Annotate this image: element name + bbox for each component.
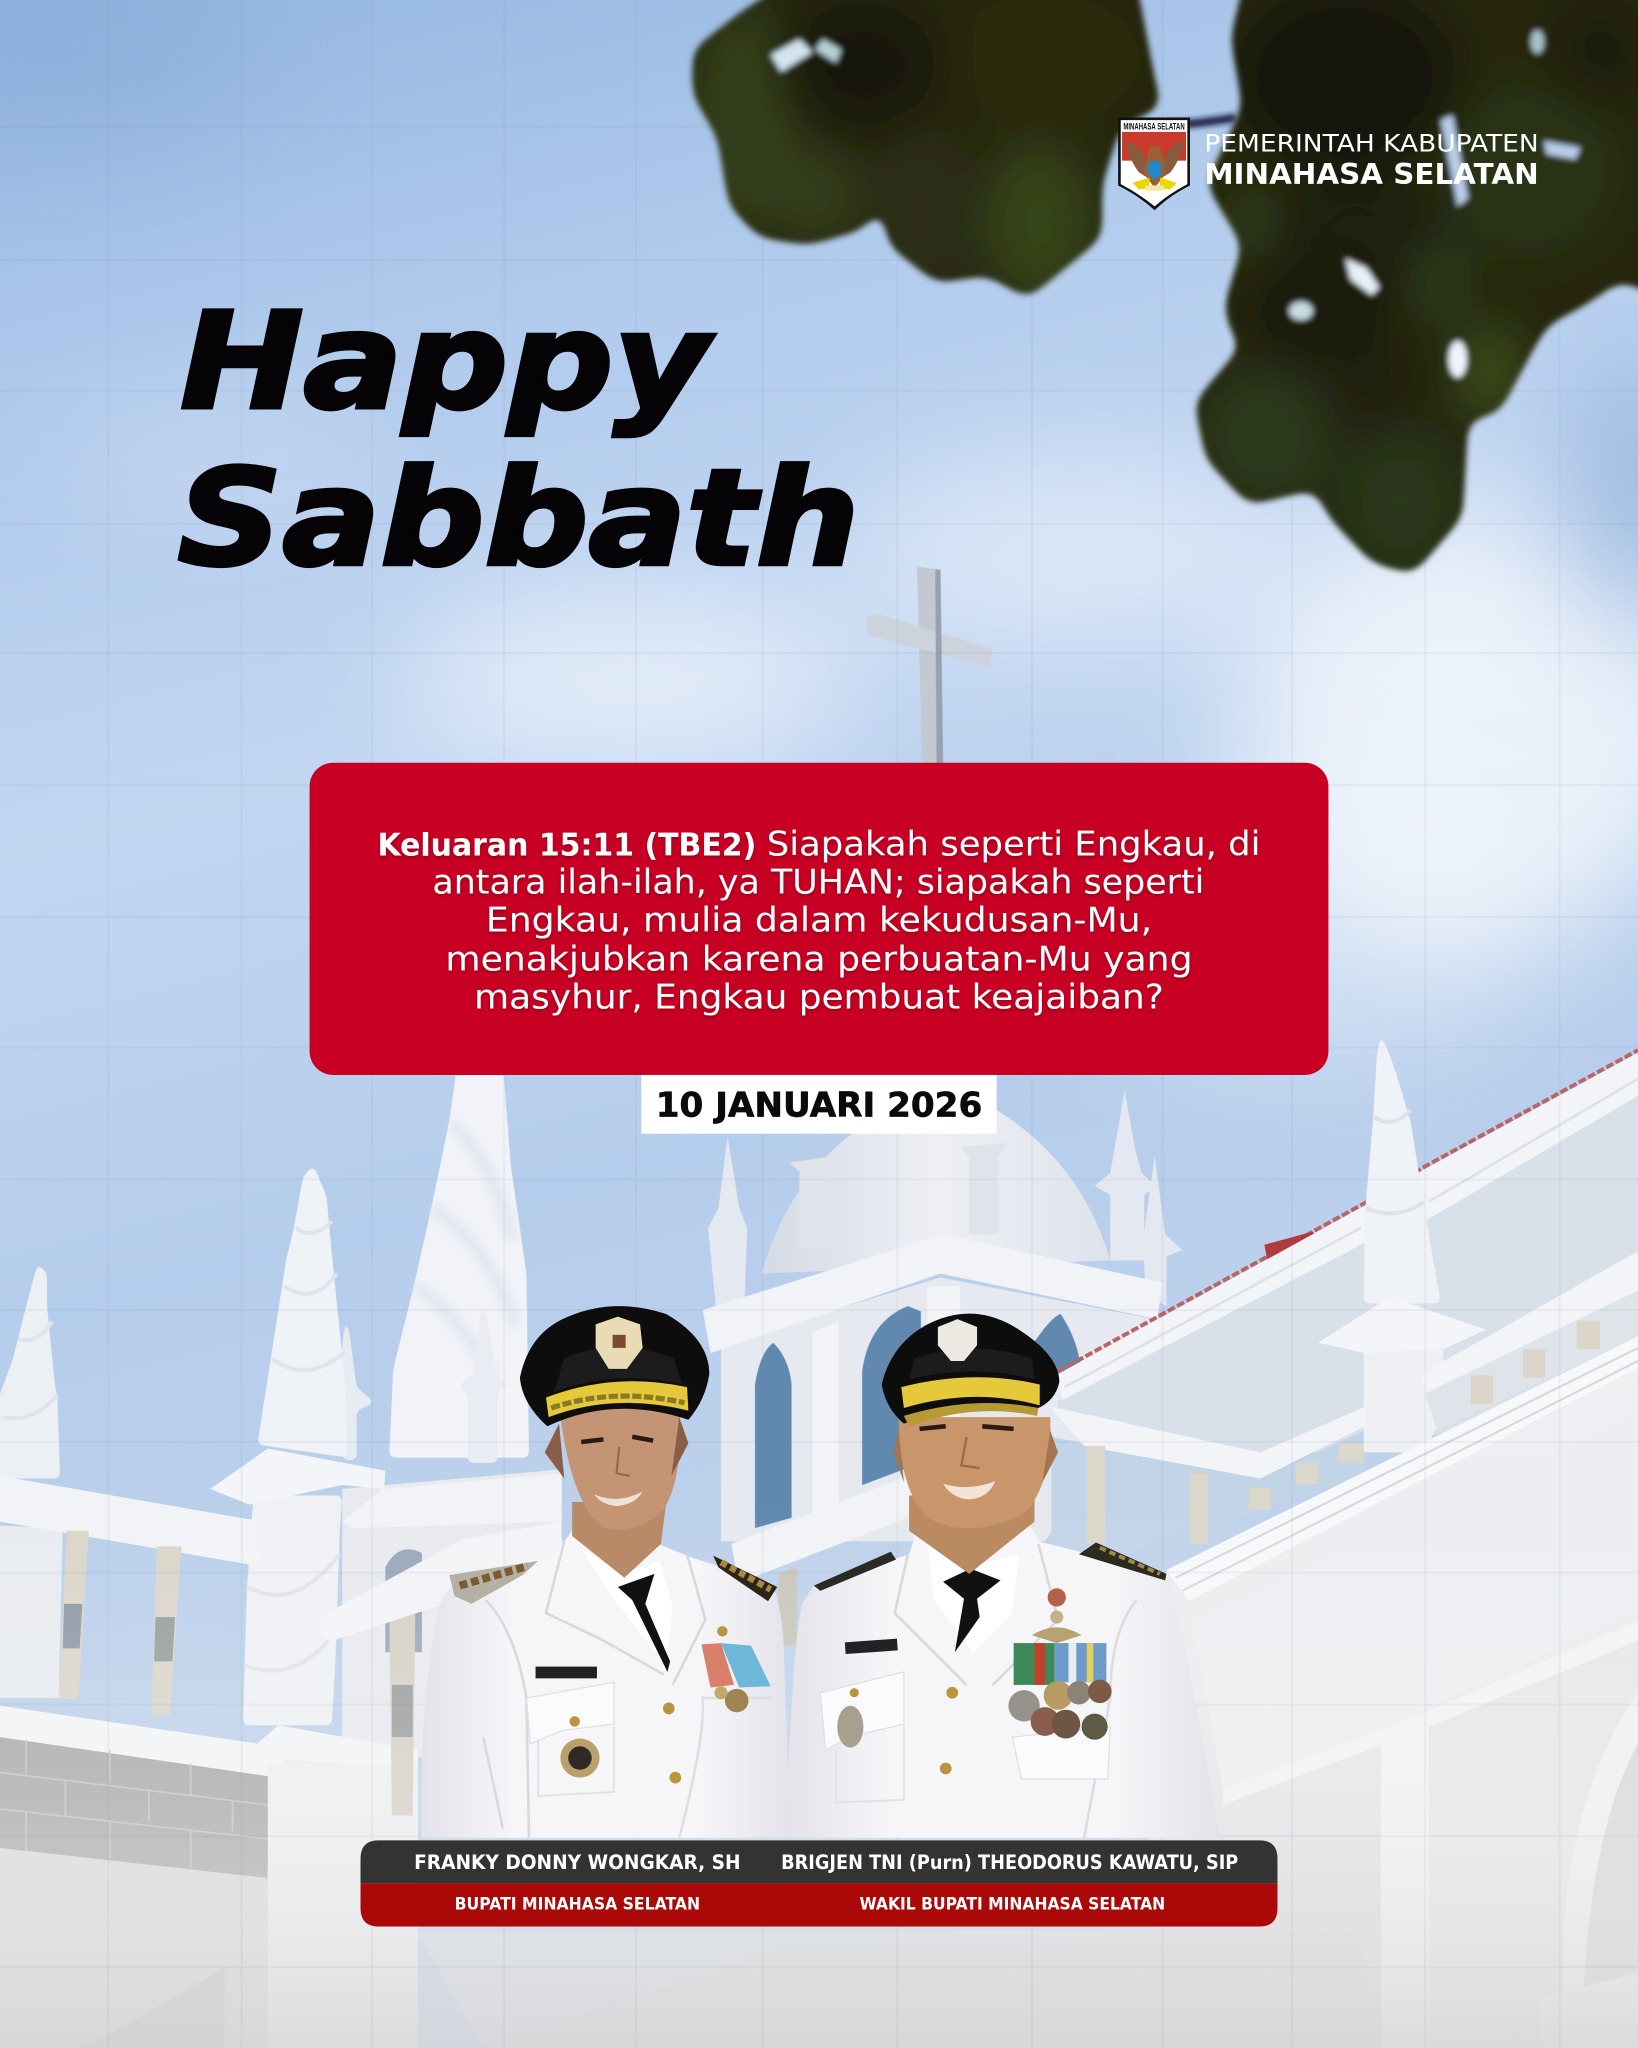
government name: MINAHASA SELATAN	[1204, 157, 1539, 191]
uniform	[421, 1531, 790, 1838]
middle balustrade	[1050, 1407, 1365, 1479]
breast badge	[837, 1706, 863, 1748]
column one	[0, 1526, 63, 1698]
medals	[1008, 1643, 1112, 1740]
tiny spire	[340, 1307, 375, 1460]
tower body	[721, 1277, 1155, 1541]
roof tiles	[1058, 1050, 1638, 1371]
dome	[762, 1074, 1110, 1273]
cross	[866, 567, 993, 764]
diagonal centre balustrade	[316, 1522, 564, 1642]
leaf masses	[653, 0, 1638, 588]
main cornice	[1166, 1336, 1638, 1601]
emblem shield	[1118, 118, 1190, 210]
folds, sleeve seam and lapel	[483, 1541, 705, 1838]
medals	[701, 1643, 734, 1688]
panel: scripture verse	[310, 763, 1328, 1075]
sky gaps through leaves	[771, 30, 1581, 377]
name tag	[845, 1639, 898, 1654]
lower left wall	[0, 1706, 418, 2048]
verse text: menakjubkan karena perbuatan-Mu yang	[445, 939, 1193, 979]
big twisted spire	[389, 1064, 529, 1458]
stained glass windows	[755, 1306, 1082, 1528]
date label: 10 JANUARI 2026	[656, 1086, 982, 1126]
portrait: regent	[421, 1306, 790, 1838]
uniform	[784, 1515, 1220, 1838]
officer cap	[520, 1306, 709, 1426]
ground shading	[483, 1930, 1379, 2048]
verse text	[377, 825, 1261, 1017]
buttons	[570, 1703, 681, 1784]
epaulettes	[449, 1561, 538, 1604]
column two	[243, 1496, 342, 1725]
faded overlay at bottom	[0, 1502, 1638, 2048]
verse text: masyhur, Engkau pembuat keajaiban?	[474, 977, 1164, 1017]
emblem shield: MINAHASA SELATAN	[1123, 121, 1185, 131]
church building	[0, 567, 1638, 2048]
title: Sabbath	[178, 441, 859, 596]
spire one	[0, 1263, 60, 1479]
pillar	[1381, 1724, 1429, 2048]
buttons	[850, 1687, 958, 1774]
portrait: vice regent	[784, 1314, 1220, 1838]
tie	[943, 1569, 1001, 1652]
right spire	[1364, 1032, 1441, 1304]
officer cap	[882, 1314, 1059, 1424]
upper towers spires	[708, 1091, 1182, 1306]
title	[178, 285, 859, 596]
cap badge	[596, 1317, 643, 1369]
breast badge	[560, 1738, 600, 1778]
left rear baluster	[389, 1604, 415, 1816]
arch	[1564, 1691, 1638, 2048]
title: regent: BUPATI MINAHASA SELATAN	[455, 1895, 700, 1915]
name banner	[361, 1840, 1277, 1927]
logo	[1118, 118, 1539, 210]
sky and lower wall below balustrade	[1052, 1430, 1365, 1554]
name: regent: FRANKY DONNY WONGKAR, SH	[414, 1851, 741, 1874]
right balustrade	[1421, 1251, 1638, 1394]
tie	[618, 1574, 670, 1672]
leaves	[653, 0, 1638, 588]
branch	[1110, 118, 1236, 127]
name tag	[536, 1667, 597, 1678]
roof cornice	[1058, 1053, 1638, 1400]
verse text: antara ilah-ilah, ya TUHAN; siapakah seperti	[432, 862, 1204, 902]
stone wall	[0, 1737, 269, 1878]
government name	[1204, 130, 1539, 191]
cap badge	[938, 1319, 977, 1361]
title: vice regent: WAKIL BUPATI MINAHASA SELATAN	[859, 1895, 1165, 1915]
date label	[641, 1075, 997, 1134]
government name: PEMERINTAH KABUPATEN	[1204, 130, 1539, 158]
banner red strip	[361, 1883, 1277, 1927]
banner dark strip	[361, 1840, 1277, 1883]
left tower block	[342, 1469, 562, 1757]
shirt collar	[581, 1548, 673, 1665]
verse text: Engkau, mulia dalam kekudusan-Mu,	[486, 900, 1152, 940]
verse text: Keluaran 15:11 (TBE2)	[377, 828, 756, 864]
name: vice regent: BRIGJEN TNI (Purn) THEODORUS KAWATU, SIP	[781, 1851, 1238, 1874]
spire two	[257, 1165, 347, 1458]
right roof wall	[1058, 1091, 1638, 1452]
title: Happy	[180, 285, 715, 440]
left balustrade	[0, 1476, 263, 1566]
eave soffit	[1193, 1413, 1638, 1789]
main lower building	[1149, 1336, 1638, 2048]
neck and face	[909, 1496, 1035, 1574]
verse text: Siapakah seperti Engkau, di	[767, 825, 1261, 865]
shirt collar	[927, 1541, 1019, 1652]
neck and face	[572, 1502, 666, 1578]
epaulettes	[814, 1552, 896, 1591]
